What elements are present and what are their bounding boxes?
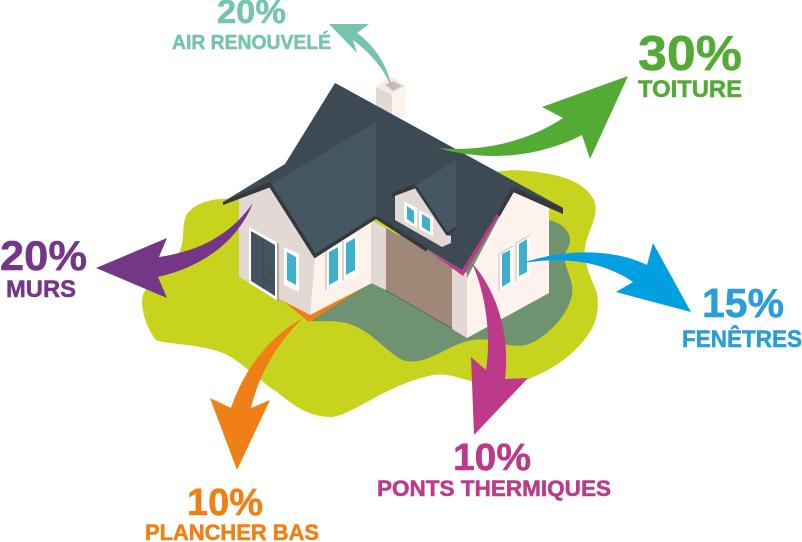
label: murs: MURS xyxy=(6,276,76,303)
label: fenêtres: 15% xyxy=(702,280,784,326)
arrow: toiture xyxy=(437,76,628,159)
orange floor strip xyxy=(284,282,372,322)
label: air renouvelé xyxy=(172,0,331,54)
chimney xyxy=(376,77,406,118)
right wall xyxy=(467,191,549,338)
label: ponts thermiques xyxy=(377,437,611,501)
label: air renouvelé: AIR RENOUVELÉ xyxy=(172,31,331,54)
label: plancher bas xyxy=(145,482,319,542)
label: murs xyxy=(0,232,87,303)
label: murs: 20% xyxy=(0,232,87,279)
arrow: plancher bas xyxy=(210,318,303,470)
main roof xyxy=(223,83,563,270)
label: ponts thermiques: 10% xyxy=(453,437,531,479)
house xyxy=(223,77,563,338)
corner pillar xyxy=(452,265,467,338)
label: ponts thermiques: PONTS THERMIQUES xyxy=(377,476,611,501)
arrow: ponts thermiques xyxy=(471,263,528,435)
house shadow xyxy=(300,190,572,362)
label: plancher bas: 10% xyxy=(187,482,263,524)
roof ridge highlight xyxy=(335,83,563,210)
pillar xyxy=(371,220,386,290)
magenta thermal bridge strip xyxy=(427,214,499,276)
left door xyxy=(249,227,279,302)
arrow: air renouvelé xyxy=(329,24,392,89)
arrow: murs xyxy=(96,203,253,298)
front gable roof xyxy=(270,122,376,255)
right windows xyxy=(499,235,530,292)
label: toiture: 30% xyxy=(638,27,742,81)
garage door xyxy=(386,228,452,328)
front windows xyxy=(326,234,357,290)
left window xyxy=(284,247,299,292)
left wall xyxy=(239,183,315,315)
lawn blob xyxy=(142,170,598,417)
label: toiture xyxy=(638,27,742,103)
label: toiture: TOITURE xyxy=(638,76,742,103)
arrow: fenêtres xyxy=(523,243,691,312)
roof eave edges xyxy=(223,182,563,256)
front wall xyxy=(310,220,372,315)
dormer xyxy=(392,160,456,247)
label: fenêtres xyxy=(682,280,802,353)
